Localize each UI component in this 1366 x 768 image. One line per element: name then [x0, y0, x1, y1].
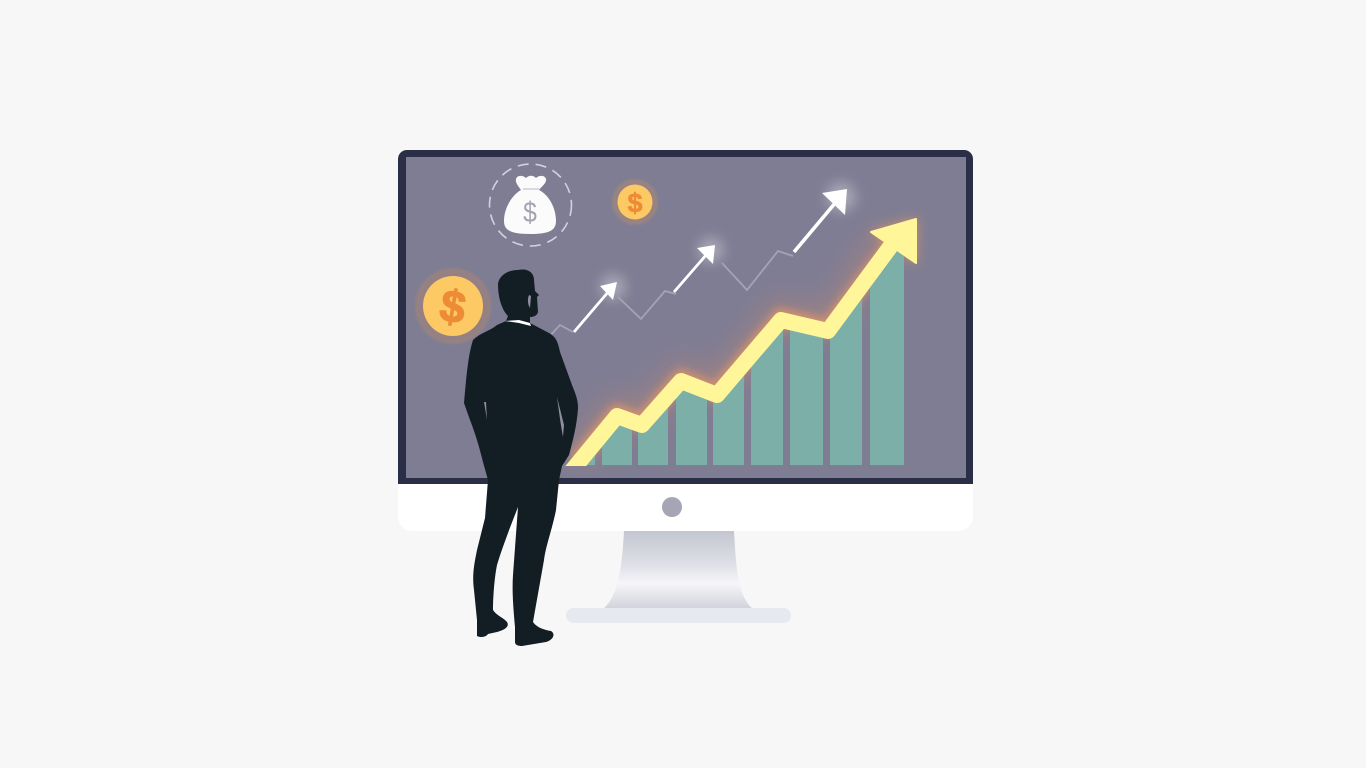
- arrow glow: [576, 218, 917, 462]
- icon: small gold coin: $: [627, 188, 643, 218]
- white rising arrows and thin trend line: [548, 182, 856, 338]
- monitor stand: [566, 531, 791, 623]
- icon: small gold coin: [612, 179, 658, 225]
- illustration: investor looking at a growth chart on a monitor: [398, 150, 973, 646]
- icon: large gold coin: [415, 268, 491, 344]
- bar chart: [582, 235, 904, 465]
- icon: money bag with dashed circle: $: [523, 196, 537, 228]
- monitor chin: [398, 482, 973, 531]
- person silhouette: [464, 269, 578, 646]
- monitor frame: [398, 150, 973, 484]
- yellow growth arrow: [570, 219, 916, 473]
- icon: large gold coin: $: [436, 279, 470, 334]
- icon: money bag with dashed circle: [490, 164, 572, 246]
- screen panel: [406, 157, 966, 478]
